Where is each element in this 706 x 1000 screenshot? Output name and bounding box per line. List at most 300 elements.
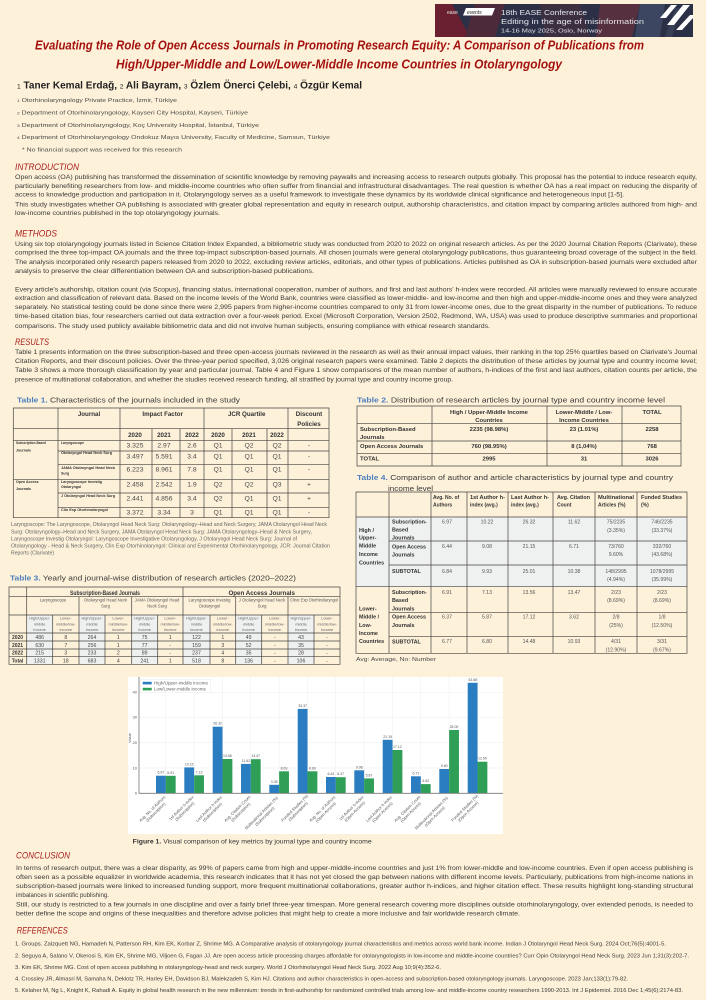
table 3 data: 233 [88, 651, 96, 657]
conference banner: 14-16 May 2025, Oslo, Norway [501, 28, 602, 34]
table 3 income subheaders: High/Upper- [291, 616, 312, 621]
conference banner: events [467, 10, 482, 16]
table 1 data: 2.6 [187, 443, 197, 450]
table 3 income subheaders: High/Upper- [134, 616, 156, 621]
table 1 data [126, 443, 311, 517]
table 4 data: 10.38 [568, 569, 581, 575]
table 1 data: Q1 [272, 496, 282, 503]
x axis labels: Avg. Citation Count [393, 794, 422, 823]
table 1 data: Q1 [213, 467, 223, 474]
table 1 footnote: Laryngoscope Investig Otolaryngol: Laryngoscope Investigative Otolaryngology, J Otolaryngol Head Neck Surg: Journal of [11, 537, 298, 543]
table 3 data: - [169, 651, 171, 657]
table 2 cells: Subscription-Based [360, 427, 416, 433]
table 3 group headers [70, 590, 295, 597]
y axis labels: Value [127, 732, 132, 743]
table 4 journal type labels [392, 520, 427, 645]
table 1 data: Q1 [213, 453, 223, 460]
table 4 header: Multinational [598, 495, 635, 501]
table 3 data: - [274, 643, 276, 649]
heading: references: REFERENCES [17, 925, 68, 935]
table 4 [356, 473, 687, 663]
table 4 data: 3/31 [657, 639, 667, 645]
table 4 journal type labels: Subscription- [392, 520, 427, 526]
table 3 income subheaders: middle [191, 621, 202, 626]
table 3 income subheaders: income [60, 627, 72, 632]
table 4 data: 6.77 [442, 639, 452, 645]
table 3 income subheaders: middle/low- [265, 621, 285, 626]
table 1 data: 3 [190, 510, 194, 517]
table 4 data: 6.91 [442, 590, 452, 596]
table 3 income subheaders [29, 616, 338, 632]
table 3 data: 77 [142, 643, 148, 649]
references list: 3. Kim EK, Shrime MG. Cost of open access publishing in otolaryngology-head and neck surgery. World J Otorhinolaryngol Head Neck Surg. 2022 Aug 10;9(4):352-6. [15, 965, 441, 971]
table 3 data: 237 [192, 651, 201, 657]
methods text: Using six top otolaryngology journals listed in Science Citation Index Expanded, a bibliometric study was conducted from 2020 to 2022 on original research articles. As per the 2020 Journal Citation Reports (Clarivate), these [15, 241, 698, 248]
x axis labels: Funded Studies (%) [450, 793, 480, 823]
table 3 data: 1 [117, 635, 120, 641]
table 3 data: 4 [117, 658, 120, 664]
x axis labels [138, 793, 483, 834]
table 3 income subheaders: income [33, 627, 46, 632]
x axis labels: 1st Author h-index [338, 795, 365, 821]
bar value labels: 7.13 [196, 770, 202, 774]
table 3 journal headers: Clinic Exp Otorhinolaryngol [290, 597, 338, 602]
table 3 journal headers: Otolaryngol Head Neck [84, 597, 128, 602]
table 3 shaded cells [27, 615, 314, 664]
table 3 year labels: 2022 [12, 651, 23, 657]
table 3 income subheaders: income [242, 627, 255, 632]
table 1 header: 2022 [270, 432, 284, 439]
table 4 data: 13.47 [568, 590, 581, 596]
references list: 4. Crossley JR, Almasri M, Samaha N, Deklotz TR, Harley EH, Davidson BJ, Malekzadeh S, Kim HJ. Citations and author characteristics in open-access and subscription-based otolaryngology journals. Laryngoscope. 2023 Jan;133(1):79-82. [15, 976, 628, 982]
x axis labels: (Open Access) [371, 800, 394, 823]
table 1 header: 2020 [128, 432, 142, 439]
bar value labels: 6.44 [327, 772, 334, 776]
table 3 data: - [326, 658, 328, 664]
introduction text: access to knowledge production and participation in it. Otolaryngology serves as a useful framework to investigate these dynamics by its worldwide clinical significance and heterogeneous input [1-5]. [15, 191, 624, 198]
table 3 data: 486 [35, 635, 44, 641]
table 1 data: Q1 [244, 496, 254, 503]
table 4 journal type labels: Journals [392, 536, 414, 542]
table 1 data: Q1 [244, 510, 254, 517]
bar value labels: 43.68 [468, 678, 477, 682]
table 1 row labels: Open Access [16, 480, 39, 484]
table 3 data: - [326, 651, 328, 657]
table 4 header: Authors [433, 503, 452, 509]
table 3 income subheaders: middle [295, 621, 307, 626]
table 4 income group labels: Middle / [359, 615, 380, 621]
table 3 data: - [326, 635, 328, 641]
table 1 data: Q2 [244, 443, 254, 450]
table 2 cells: 768 [647, 444, 658, 450]
methods text: extraction and classification of relevant data. Based on the income levels of the World Bank, countries were classified as lower-middle- and low-income and then high and upper-middle-income ones and they were analyzed [15, 295, 698, 302]
table 3 income subheaders: Lower- [112, 616, 125, 621]
table 1 data: + [307, 496, 311, 503]
table 1 title: Table 1. Characteristics of the journals included in the study [17, 396, 240, 405]
table 4 data: 148/2995 [605, 569, 627, 575]
table 4 header: index (avg.) [470, 503, 498, 509]
table 4 data: (3.35%) [607, 528, 625, 534]
table 1 data: 3.4 [187, 496, 197, 503]
table 4 header [433, 495, 682, 509]
table 1 data: 2.441 [126, 496, 144, 503]
table 1 footnote: Otolaryngology - Head & Neck Surgery, Clin Exp Otorhinolaryngol: Clinical and Experimental Otorhinolaryngology, JCR: Journal Citation [11, 544, 330, 550]
table 1 data: 7.8 [187, 467, 197, 474]
x axis labels: (Open Access) [343, 800, 366, 823]
table 4 data: 10.93 [568, 639, 581, 645]
blue bars: high/upper-middle income [156, 683, 478, 793]
table 3 data: 89 [142, 651, 148, 657]
table 4 data: 9.93 [482, 569, 492, 575]
table 3 data: - [169, 643, 171, 649]
table 1 header: Policies [297, 421, 321, 428]
table 2 cells: Countries [475, 418, 503, 424]
table 3 data: - [274, 651, 276, 657]
figure 1: bar chart [127, 677, 503, 834]
table 2 cells: 2235 (98.98%) [470, 427, 508, 433]
table 4 journal type labels: SUBTOTAL [392, 569, 422, 575]
table 3 income subheaders: middle/low- [160, 621, 181, 626]
table 4 data: 25.01 [523, 569, 536, 575]
figure 1 caption: Figure 1. Visual comparison of key metrics by journal type and country income [133, 838, 372, 845]
table 1 footnote: Reports (Clarivate) [11, 551, 54, 557]
table 3 data: 43 [298, 635, 304, 641]
bar value labels: 9.60 [441, 764, 448, 768]
x axis labels: Multinational Articles (%) [244, 795, 279, 831]
title [35, 38, 644, 72]
table 3 data: 215 [35, 651, 44, 657]
table 4 data: (43.68%) [652, 552, 673, 558]
introduction text [15, 174, 698, 217]
bar value labels: 9.08 [356, 765, 363, 769]
table 3 journal headers: Surg [258, 604, 267, 609]
table 1 data: Q2 [213, 481, 223, 488]
axes [139, 677, 503, 793]
table 4 data: 1/8 [658, 615, 666, 621]
results text: Table 1 presents information on the three subscription-based and three open-access journals reviewed in the research as well as their annual impact values, their ranking in the top 25% quartiles based on Clarivate's Journal [15, 349, 697, 356]
table 4 data: 6.80 [482, 639, 492, 645]
conference banner: 18th EASE Conference [501, 10, 587, 17]
bar value labels: 6.91 [167, 771, 174, 775]
introduction text: particularly benefiting researchers from low- and middle-income countries who often suffer from financial and infrastructural disadvantages. The real question is whether OA has a real impact on reducing the disparity of [15, 183, 697, 190]
table 1 data: - [308, 510, 310, 517]
table 3 data: 241 [140, 658, 149, 664]
table 4 data: 26.32 [523, 520, 536, 526]
chart grid [139, 677, 503, 793]
table 1 data: Q1 [272, 510, 282, 517]
table 4 data: 5.87 [482, 615, 492, 621]
table 1 row labels: Otolaryngol [61, 485, 81, 489]
table 3 data: 35 [246, 651, 252, 657]
table 4 header: 1st Author h- [470, 495, 505, 501]
table 1 data: Q1 [244, 453, 254, 460]
table 3 data: 3 [221, 643, 224, 649]
table 3 data: 7 [64, 643, 67, 649]
table 3 data: 122 [192, 635, 201, 641]
affiliations: 3 Department of Otorhinolaryngology, Koç University Hospital, İstanbul, Türkiye [17, 122, 259, 129]
green bars: low/lower-middle income [166, 730, 487, 793]
table 4 income group labels: Countries [359, 560, 384, 566]
x axis labels: Avg. No. of Authors [138, 794, 166, 823]
table 3 income subheaders: income [269, 627, 281, 632]
table 1 row labels [16, 441, 115, 512]
x axis labels: Funded Studies (%) [280, 793, 310, 823]
table 1 data: Q2 [272, 443, 282, 450]
table 3 income subheaders: income [86, 627, 98, 632]
table 3 data: 683 [88, 658, 96, 664]
references list: 2. Seguya A, Salano V, Okerosi S, Kim EK, Shrime MG, Viljoen G, Fagan JJ. Are open access article processing charges affordable for otolaryngologists in low-income and middle-income countries? Curr Opin Otolaryngol Head Neck Surg. 2023 Jun 1;31(3):202-7. [15, 954, 689, 960]
table 3 income subheaders: High/Upper- [238, 616, 260, 621]
table 1 header: Discount [296, 411, 322, 418]
table 3 group headers: Open Access Journals [228, 590, 295, 597]
table 3 data: 518 [192, 658, 201, 664]
table 1 footnote: Surg: Otolaryngology–Head and Neck Surgery, JAMA Otolaryngol Head Neck Surg: JAMA Otolaryngology–Head & Neck Surgery, [11, 530, 312, 536]
table 1 data: Q1 [244, 467, 254, 474]
table 4 income group labels: Countries [359, 639, 384, 645]
table 1 data: + [307, 481, 311, 488]
table 3 journal headers: Laryngoscope [40, 597, 67, 602]
table 3 data: - [326, 643, 328, 649]
y axis labels: 40 [133, 690, 138, 695]
methods text: comprised the three top-impact OA journals and the three top-impact subscription-based journals. All chosen journals were general otolaryngology publications, thus guaranteeing broad coverage of the subject in the field. [15, 249, 697, 256]
table 4 data: (35.99%) [652, 577, 673, 583]
table 3 income subheaders: income [295, 627, 307, 632]
table 3 income subheaders: income [164, 627, 177, 632]
heading: conclusion: CONCLUSION [16, 850, 70, 860]
table 4 income group labels: Lower- [359, 606, 377, 612]
table 4 data: 7.13 [482, 590, 492, 596]
results text: Table 3 shows a more thorough classification by year and particular journal. Table 4 and Figure 1 show comparisons of the mean number of authors, h-indices of the first and last authors, citation counts per article, the [15, 367, 698, 374]
table 3 income subheaders: income [217, 627, 229, 632]
bar value labels: 6.71 [412, 771, 419, 775]
table 4 data: 2/23 [657, 590, 667, 596]
table 4 data: (9.67%) [653, 648, 671, 654]
table 4 data: 9.60% [609, 552, 624, 558]
table 2 cells: 3026 [645, 457, 659, 463]
table 3 income subheaders: High/Upper- [82, 616, 103, 621]
heading: introduction: INTRODUCTION [15, 162, 79, 172]
bar value labels: 33.37 [298, 704, 307, 708]
table 4 footnote: Avg: Average, No: Number [356, 657, 436, 663]
table 1 data: 2.97 [157, 443, 171, 450]
references list: 5. Kelaher M, Ng L, Knight K, Rahadi A. Equity in global health research in the new millennium: trends in first-authorship for randomized controlled trials among low- and middle-income country researchers 1990-2013. Int J Epidemiol. 2016 Dec 1;45(6):2174-83. [15, 988, 683, 994]
table 4 journal type labels: SUBTOTAL [392, 639, 422, 645]
table 3 data: 264 [88, 635, 96, 641]
table 2 cells: 31 [581, 457, 588, 463]
table 3 data: 1 [117, 643, 120, 649]
table 3 journal headers: Laryngoscope Investig [189, 597, 231, 602]
table 4 data: 6.44 [442, 544, 452, 550]
table 3 data: 35 [298, 643, 304, 649]
table 3 journal headers: J Otolaryngol Head Neck [239, 597, 286, 602]
table 3 year labels: 2021 [12, 643, 23, 649]
conference banner [435, 4, 693, 37]
table 3 data [34, 635, 328, 664]
table 4 journal type labels: Journals [392, 606, 414, 612]
table 4 data: 6.37 [442, 615, 452, 621]
y axis labels: 30 [133, 715, 138, 720]
table 4 data: 1078/2995 [650, 569, 674, 575]
table 4 title: Table 4. Comparison of author and article characteristics by journal type and country [357, 473, 673, 482]
table 4 income group labels: Low- [359, 623, 372, 629]
table 3 income subheaders: middle [86, 621, 98, 626]
table 1 row labels: JAMA Otolaryngol Head Neck [61, 466, 115, 470]
table 4 data: 75/2235 [607, 520, 625, 526]
heading: methods: METHODS [15, 229, 57, 239]
table 1 data: 1.9 [187, 481, 197, 488]
table 4 data: (4.94%) [607, 577, 625, 583]
bar value labels: 26.32 [213, 722, 222, 726]
table 3 year labels: 2020 [12, 635, 23, 641]
table 2 [357, 396, 681, 466]
bar value labels: 10.22 [185, 762, 194, 766]
y axis labels: 20 [133, 740, 138, 745]
bar value labels: 11.62 [242, 759, 250, 763]
table 4 header: Articles (%) [598, 503, 626, 509]
bar value labels: 13.47 [251, 754, 260, 758]
table 1 data: 2.542 [155, 481, 173, 488]
conclusion text: In terms of research output, there was a clear disparity, as 99% of papers came from high and upper-middle-income countries and just 1% from lower-middle and low-income countries. Even if open access publishing is [16, 865, 693, 872]
bar value labels: 8.69 [281, 766, 287, 770]
table 3 income subheaders: middle [243, 621, 254, 626]
methods text: analysis to preserve the clear differentiation between OA and subscription-based publications. [15, 268, 314, 275]
table 3 income subheaders: Lower- [269, 616, 281, 621]
table 4 title: income level [388, 484, 433, 493]
bar value labels: 8.69 [309, 766, 316, 770]
table 4 header: Count [557, 503, 572, 509]
x axis labels: (Subscription) [254, 805, 276, 827]
table 3 journal headers: JAMA Otolaryngol Head [135, 597, 180, 602]
table 4 header: index (avg.) [511, 503, 539, 509]
table 4 data: 14.48 [523, 639, 536, 645]
x axis labels: (Open Access) [314, 800, 337, 823]
table 3 data: 75 [142, 635, 148, 641]
table 1 header: 2020 [211, 432, 225, 439]
table 3 income subheaders: middle [34, 621, 45, 626]
table 4 journal type labels: Journals [392, 623, 414, 629]
table 3 income subheaders: income [190, 627, 203, 632]
bar value labels: 13.56 [223, 754, 232, 758]
table 4 income group labels: Middle [359, 544, 376, 550]
table 4 journal type labels: Based [392, 598, 408, 604]
table 4 data: (8.69%) [607, 598, 625, 604]
bar value labels: 3.62 [422, 779, 429, 783]
table 1 data: 3.4 [187, 453, 197, 460]
affiliations: 4 Department of Otorhinolaryngology Ondokuz Mayıs University, Faculty of Medicine, Samsun, Türkiye [17, 135, 330, 141]
conclusion text: better define the scope and origins of these inequalities and therefore advise policies that might help to create a more inclusive and fair worldwide research climate. [16, 910, 520, 917]
results text [15, 349, 698, 383]
table 2 cells: Income Countries [559, 418, 610, 424]
table 4 data: 17.12 [523, 615, 536, 621]
bar value labels: 3.35 [271, 780, 278, 784]
table 4 data: 332/760 [653, 544, 671, 550]
table 2 title: Table 2. Distribution of research articles by journal type and country income level [357, 396, 665, 405]
bar value labels: 25.00 [450, 725, 458, 729]
table 1 data: 2.458 [126, 481, 144, 488]
table 1 data: 5.591 [155, 453, 173, 460]
table 1 data: 4.856 [155, 496, 173, 503]
table 4 shaded group [356, 517, 687, 587]
table 1 data: Q3 [272, 481, 282, 488]
table 3 data: 8 [221, 658, 224, 664]
x axis labels: (Subscription) [202, 801, 223, 823]
methods text: separately. No statistical testing could be done since there were 2,995 papers from higher-income countries compared to only 31 from lower-income ones, due to the great disparity in the number of publications. To reduce [15, 304, 698, 311]
table 4 data: 3.62 [569, 615, 579, 621]
table 1 row labels: Surg [61, 471, 69, 475]
table 1 data: Q1 [272, 467, 282, 474]
table 4 header: (%) [641, 503, 649, 509]
conference banner: ease [447, 10, 458, 16]
table 3 data: 159 [192, 643, 201, 649]
table 3 data: 1 [169, 635, 172, 641]
table 1 row labels: Subscription-Based [16, 441, 46, 445]
table 4 data: 10.22 [481, 520, 494, 526]
table 2 cells: 2995 [482, 457, 496, 463]
bar value labels: 17.12 [393, 745, 402, 749]
table 1 header [78, 411, 322, 439]
table 3 income subheaders: Lower- [164, 616, 177, 621]
table 4 data: (12.90%) [606, 648, 627, 654]
table 3 data: 1 [221, 635, 224, 641]
table 2 cells [360, 410, 662, 463]
table 2 cells: High / Upper-Middle Income [450, 410, 529, 416]
table 4 data: (33.37%) [652, 528, 673, 534]
x axis labels: (Subscription) [145, 801, 167, 823]
table 4 journal type labels: Open Access [392, 544, 426, 550]
x axis labels: (Open Access) [423, 805, 446, 828]
table 4 data: (25%) [609, 623, 623, 629]
table 3 data: 630 [35, 643, 44, 649]
x axis labels: Avg. No. of Authors [308, 794, 336, 823]
table 1 footnote [11, 522, 330, 557]
table 1 data: 8.961 [155, 467, 173, 474]
results text: presence of multinational collaboration, and whether the studies received research funding, all stratified by journal type and country income group. [15, 376, 453, 383]
table 4 data: 13.56 [523, 590, 536, 596]
table 1 grid [13, 408, 329, 518]
table 4 data: 4/31 [611, 639, 621, 645]
methods text [15, 241, 698, 330]
table 4 income group labels [359, 528, 384, 645]
conclusion text: subscription-based journals were linked to increased funding support, more frequent multinational collaborations, greater author h-indices, and higher citation effect. These results highlight long-standing structural [16, 883, 693, 890]
table 2 cells: 23 (1.01%) [570, 427, 598, 433]
references list [15, 942, 689, 994]
table 3 income subheaders: High/Upper- [186, 616, 208, 621]
table 3 group headers: Subscription-Based Journals [70, 590, 140, 597]
table 4 header: Last Author h- [511, 495, 549, 501]
table 3 grid [9, 587, 340, 664]
table 4 data [442, 520, 674, 654]
table 4 header: Avg. No. of [433, 495, 460, 501]
table 1 data: Q1 [213, 510, 223, 517]
methods text: time-based citation bias, four researchers carried out data extraction over a four-week period. Excel (Microsoft Corporation, Version 2502, Redmond, WA, USA) was used to produce descriptive summaries and proportional [15, 313, 697, 320]
introduction text: This study investigates whether OA publishing is associated with greater global representation and equity in research output, authorship characteristics, and citation impact by comparing articles authored from high- and [15, 201, 698, 208]
chart legend: High/Upper-middle income [154, 681, 209, 686]
table 4 title [357, 473, 673, 493]
table 2 cells: TOTAL [642, 410, 662, 416]
table 4 income group labels: High / [359, 528, 374, 534]
table 4 data: 21.15 [523, 544, 536, 550]
introduction text: Open access (OA) publishing has transformed the dissemination of scientific knowledge by removing paywalls and increasing access to research outputs globally. This proposal has the potential to induce research equity, [15, 174, 697, 181]
table 1 data: 3.34 [157, 510, 171, 517]
table 2 cells: 2258 [645, 427, 659, 433]
table 3 journal headers: Otolaryngol [199, 604, 220, 609]
table 1 data: 6.223 [126, 467, 144, 474]
x axis labels: Last Author h-index [365, 794, 393, 823]
table 3 journal headers: Neck Surg [147, 604, 167, 609]
table 1 data: 3.325 [126, 443, 144, 450]
title: High/Upper-Middle and Low/Lower-Middle Income Countries in Otolaryngology [116, 58, 563, 72]
table 3 data: 4 [221, 651, 224, 657]
